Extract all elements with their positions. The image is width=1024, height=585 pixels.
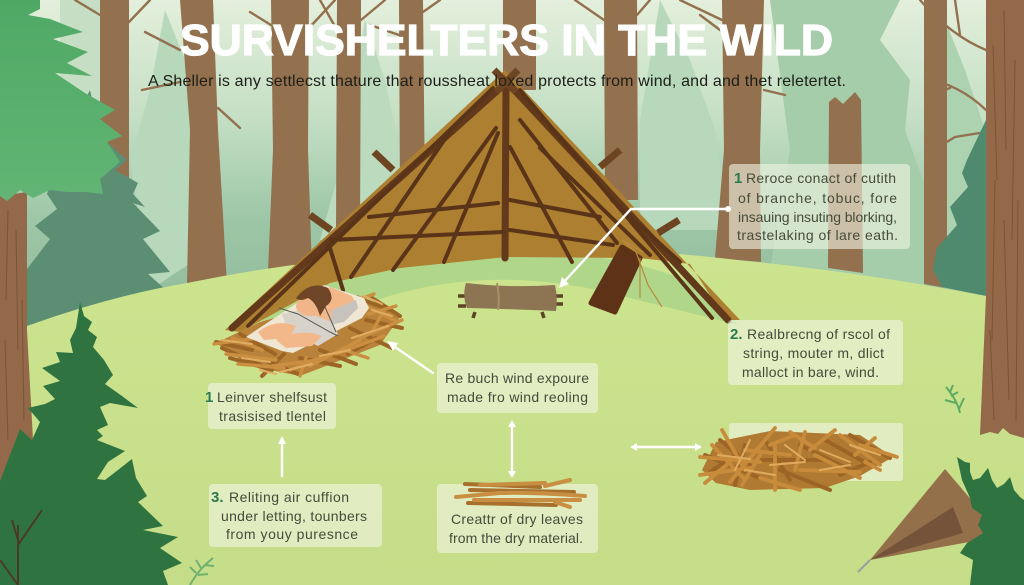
arrow: callout 1 to log bundle [559,206,731,288]
illustration: stick pile [700,428,897,490]
arrow: horizontal double [630,443,702,451]
callout: reduce contact [729,164,910,249]
callout: shelter insulation: 1 [205,389,213,406]
shelter golden canvas [225,70,740,332]
shelter frame [232,70,728,328]
arrow: vertical double [508,420,516,478]
arrow: wind callout to bedding [387,341,433,373]
main lean-to shelter [225,70,740,340]
background tree trunks [100,0,947,288]
callout: shelter insulation: Leinver shelfsust [217,389,327,405]
background tree branches [75,0,986,146]
big trunk left [0,192,33,481]
resting person on mat [246,285,369,353]
storage bag leaning on shelter [591,240,662,312]
callout: string and wind [728,320,903,385]
callout: air cushion: 3. [211,489,224,506]
callout: reduce contact: 1 [734,170,742,187]
arrow: up to shelter insulation callout [278,436,286,476]
callout: reduce contact: of branche, tobuc, fore [738,190,897,206]
callout: shelter insulation [205,383,336,429]
title: SURVISHELTERS IN THE WILD [180,16,833,65]
shelter inner ground [262,252,738,340]
callout: string and wind: Realbrecng of rscol of [747,326,890,342]
callout: string and wind: malloct in bare, wind. [742,364,879,380]
subtitle: A Sheller is any settlecst thature that roussheat loxed protects from wind, and and thet reletertet. [148,73,846,90]
callout: wind exposure [437,363,598,413]
callout: air cushion [209,484,382,547]
small background tent [858,469,997,572]
callout: air cushion: Reliting air cuffion [229,489,349,505]
big trunk right [980,0,1024,438]
callout: reduce contact: Reroce conact of cutith [746,170,896,186]
bedding nest [214,294,402,376]
callout: string and wind: string, mouter m, dlict [743,345,884,361]
illustration: bundled sticks [456,480,585,507]
forest background [0,0,1024,340]
callout: air cushion: under letting, tounbers [221,508,367,524]
callout: stick pile panel [729,423,903,481]
callout: reduce contact: trastelaking of lare eath. [737,227,898,243]
callout: wind exposure: Re buch wind expoure [445,370,589,386]
plant sprig right [945,385,964,413]
tree: light green foreground [0,0,122,201]
callout: string and wind: 2. [730,326,743,343]
tree: muted green left [27,90,170,326]
callout: reduce contact: insauing insuting blorking, [738,209,897,225]
callout: shelter insulation: trasisised tlentel [219,408,326,424]
callout: dry leaves: from the dry material. [449,530,583,546]
callout: air cushion: from youy puresnce [226,526,358,542]
hillside ground [0,248,1024,585]
callout: dry leaves [437,484,598,553]
log bundle [458,283,563,318]
tree: muted green right [933,120,986,296]
tree: dark green bottom right [957,457,1024,585]
callout: wind exposure: made fro wind reoling [447,389,588,405]
tree: dark green foreground left [0,302,182,585]
callout: dry leaves: Creattr of dry leaves [451,511,583,527]
plant sprig bottom left [190,558,214,585]
